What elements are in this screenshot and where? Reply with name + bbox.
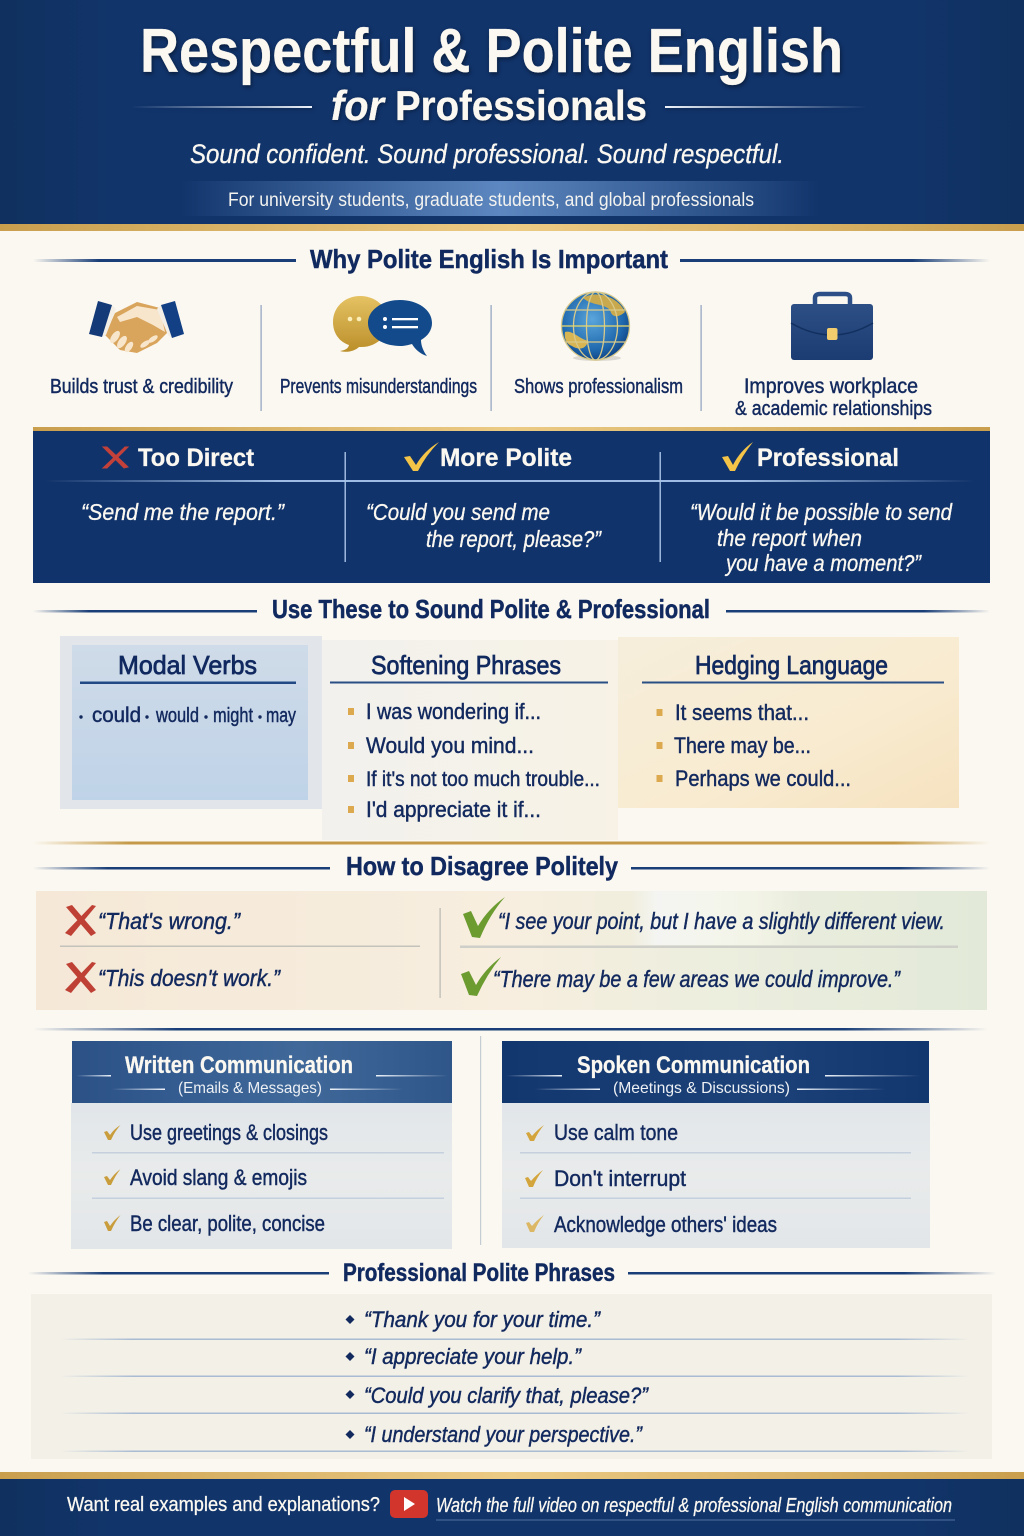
quotes: the report when [717, 525, 862, 551]
column head: too direct: Too Direct [138, 444, 255, 472]
quotes: the report, please?” [426, 526, 602, 552]
panel: spoken communication: Acknowledge others' ideas [554, 1212, 777, 1237]
quotes: “Would it be possible to send [690, 499, 953, 525]
panel: modal verbs [60, 636, 322, 809]
icon: check [404, 442, 439, 471]
icon: check [461, 957, 501, 996]
audience band: For university students, graduate students, and global professionals [228, 190, 754, 211]
icon: globe [562, 292, 630, 361]
polite phrase: “There may be a few areas we could improve.” [493, 966, 901, 992]
rule above communication panels [33, 1028, 988, 1030]
panel: softening phrases: If it's not too much trouble... [366, 768, 600, 791]
heading: Use These to Sound Polite & Professional [272, 594, 710, 624]
panel: spoken communication: Don't interrupt [554, 1166, 686, 1191]
quotes: “Could you send me [366, 499, 550, 525]
quotes [81, 499, 953, 576]
icon: check [722, 442, 753, 471]
panel: hedging language: Hedging Language [695, 650, 888, 680]
panel: softening phrases: I was wondering if... [366, 699, 541, 724]
centre divider [480, 1036, 481, 1245]
icon: check [463, 897, 505, 938]
panel: spoken communication: (Meetings & Discussions) [613, 1080, 790, 1097]
icon: speech bubbles [333, 296, 432, 356]
icon: cross [65, 905, 96, 936]
panel: written communication: Be clear, polite, concise [130, 1211, 325, 1236]
panel: softening phrases: Softening Phrases [371, 650, 561, 680]
panel: tone comparison [33, 427, 990, 583]
column head: professional: Professional [757, 444, 899, 472]
icon: briefcase [791, 294, 873, 360]
icon: play button [390, 1490, 428, 1518]
polite phrase: “I see your point, but I have a slightly different view. [498, 908, 945, 934]
benefit labels: & academic relationships [735, 398, 932, 420]
section: professional polite phrases [28, 1259, 996, 1459]
phrases panel: “Thank you for your time.” [364, 1307, 602, 1332]
icon: cross [65, 962, 96, 993]
panel: hedging language: It seems that... [675, 700, 809, 725]
panel: modal verbs: Modal Verbs [118, 650, 257, 680]
benefit labels: Improves workplace [744, 375, 918, 398]
panel: modal verbs: would [155, 705, 199, 727]
phrases panel: “Could you clarify that, please?” [364, 1383, 650, 1408]
benefit labels: Shows professionalism [514, 376, 683, 398]
subtitle: Professionals [395, 82, 647, 129]
blunt phrase: “This doesn't work.” [98, 965, 281, 991]
panel: hedging language: There may be... [674, 733, 811, 758]
benefit labels [50, 375, 932, 420]
section: how to disagree politely [33, 842, 990, 1010]
panel: spoken communication: Use calm tone [554, 1120, 678, 1145]
panel: spoken communication [502, 1041, 930, 1248]
panel: written communication [71, 1041, 452, 1249]
panel: written communication: Use greetings & closings [130, 1120, 328, 1145]
icon: cross [103, 447, 128, 468]
blunt phrase: “That's wrong.” [98, 908, 241, 934]
panel: softening phrases [322, 640, 618, 840]
header banner [0, 0, 1024, 231]
heading: How to Disagree Politely [346, 851, 618, 881]
heading: Why Polite English Is Important [310, 244, 668, 274]
quotes: you have a moment?” [724, 550, 922, 576]
phrases panel: “I appreciate your help.” [364, 1344, 583, 1369]
title: Respectful & Polite English [140, 17, 843, 86]
icon: handshake [89, 301, 184, 354]
column head: more polite: More Polite [440, 444, 572, 472]
subtitle [130, 82, 867, 129]
panel: modal verbs: could [92, 704, 141, 727]
panel: softening phrases: I'd appreciate it if... [366, 797, 541, 822]
subtitle: for [331, 82, 387, 129]
panel: spoken communication: Spoken Communication [577, 1052, 810, 1079]
panel: hedging language [618, 637, 959, 808]
panel: written communication: Avoid slang & emojis [130, 1165, 307, 1190]
footer banner [0, 1472, 1024, 1536]
panel: modal verbs: may [266, 705, 296, 727]
quotes: “Send me the report.” [81, 499, 285, 525]
phrases panel [31, 1294, 992, 1459]
benefit labels: Builds trust & credibility [50, 376, 233, 398]
panel: written communication: Written Communication [125, 1052, 353, 1079]
disagree panel [36, 891, 987, 1010]
panel: hedging language: Perhaps we could... [675, 766, 851, 791]
phrases panel: “I understand your perspective.” [364, 1422, 643, 1447]
panel: written communication: (Emails & Messages) [178, 1080, 322, 1097]
audience band [180, 181, 820, 216]
heading: Professional Polite Phrases [343, 1259, 615, 1287]
panel: modal verbs: might [213, 705, 253, 727]
benefit labels: Prevents misunderstandings [280, 376, 477, 398]
tagline: Sound confident. Sound professional. Sound respectful. [190, 139, 784, 169]
section: why polite English is important [33, 244, 990, 420]
panel: softening phrases: Would you mind... [366, 733, 534, 758]
footer prompt: Want real examples and explanations? [67, 1494, 380, 1516]
